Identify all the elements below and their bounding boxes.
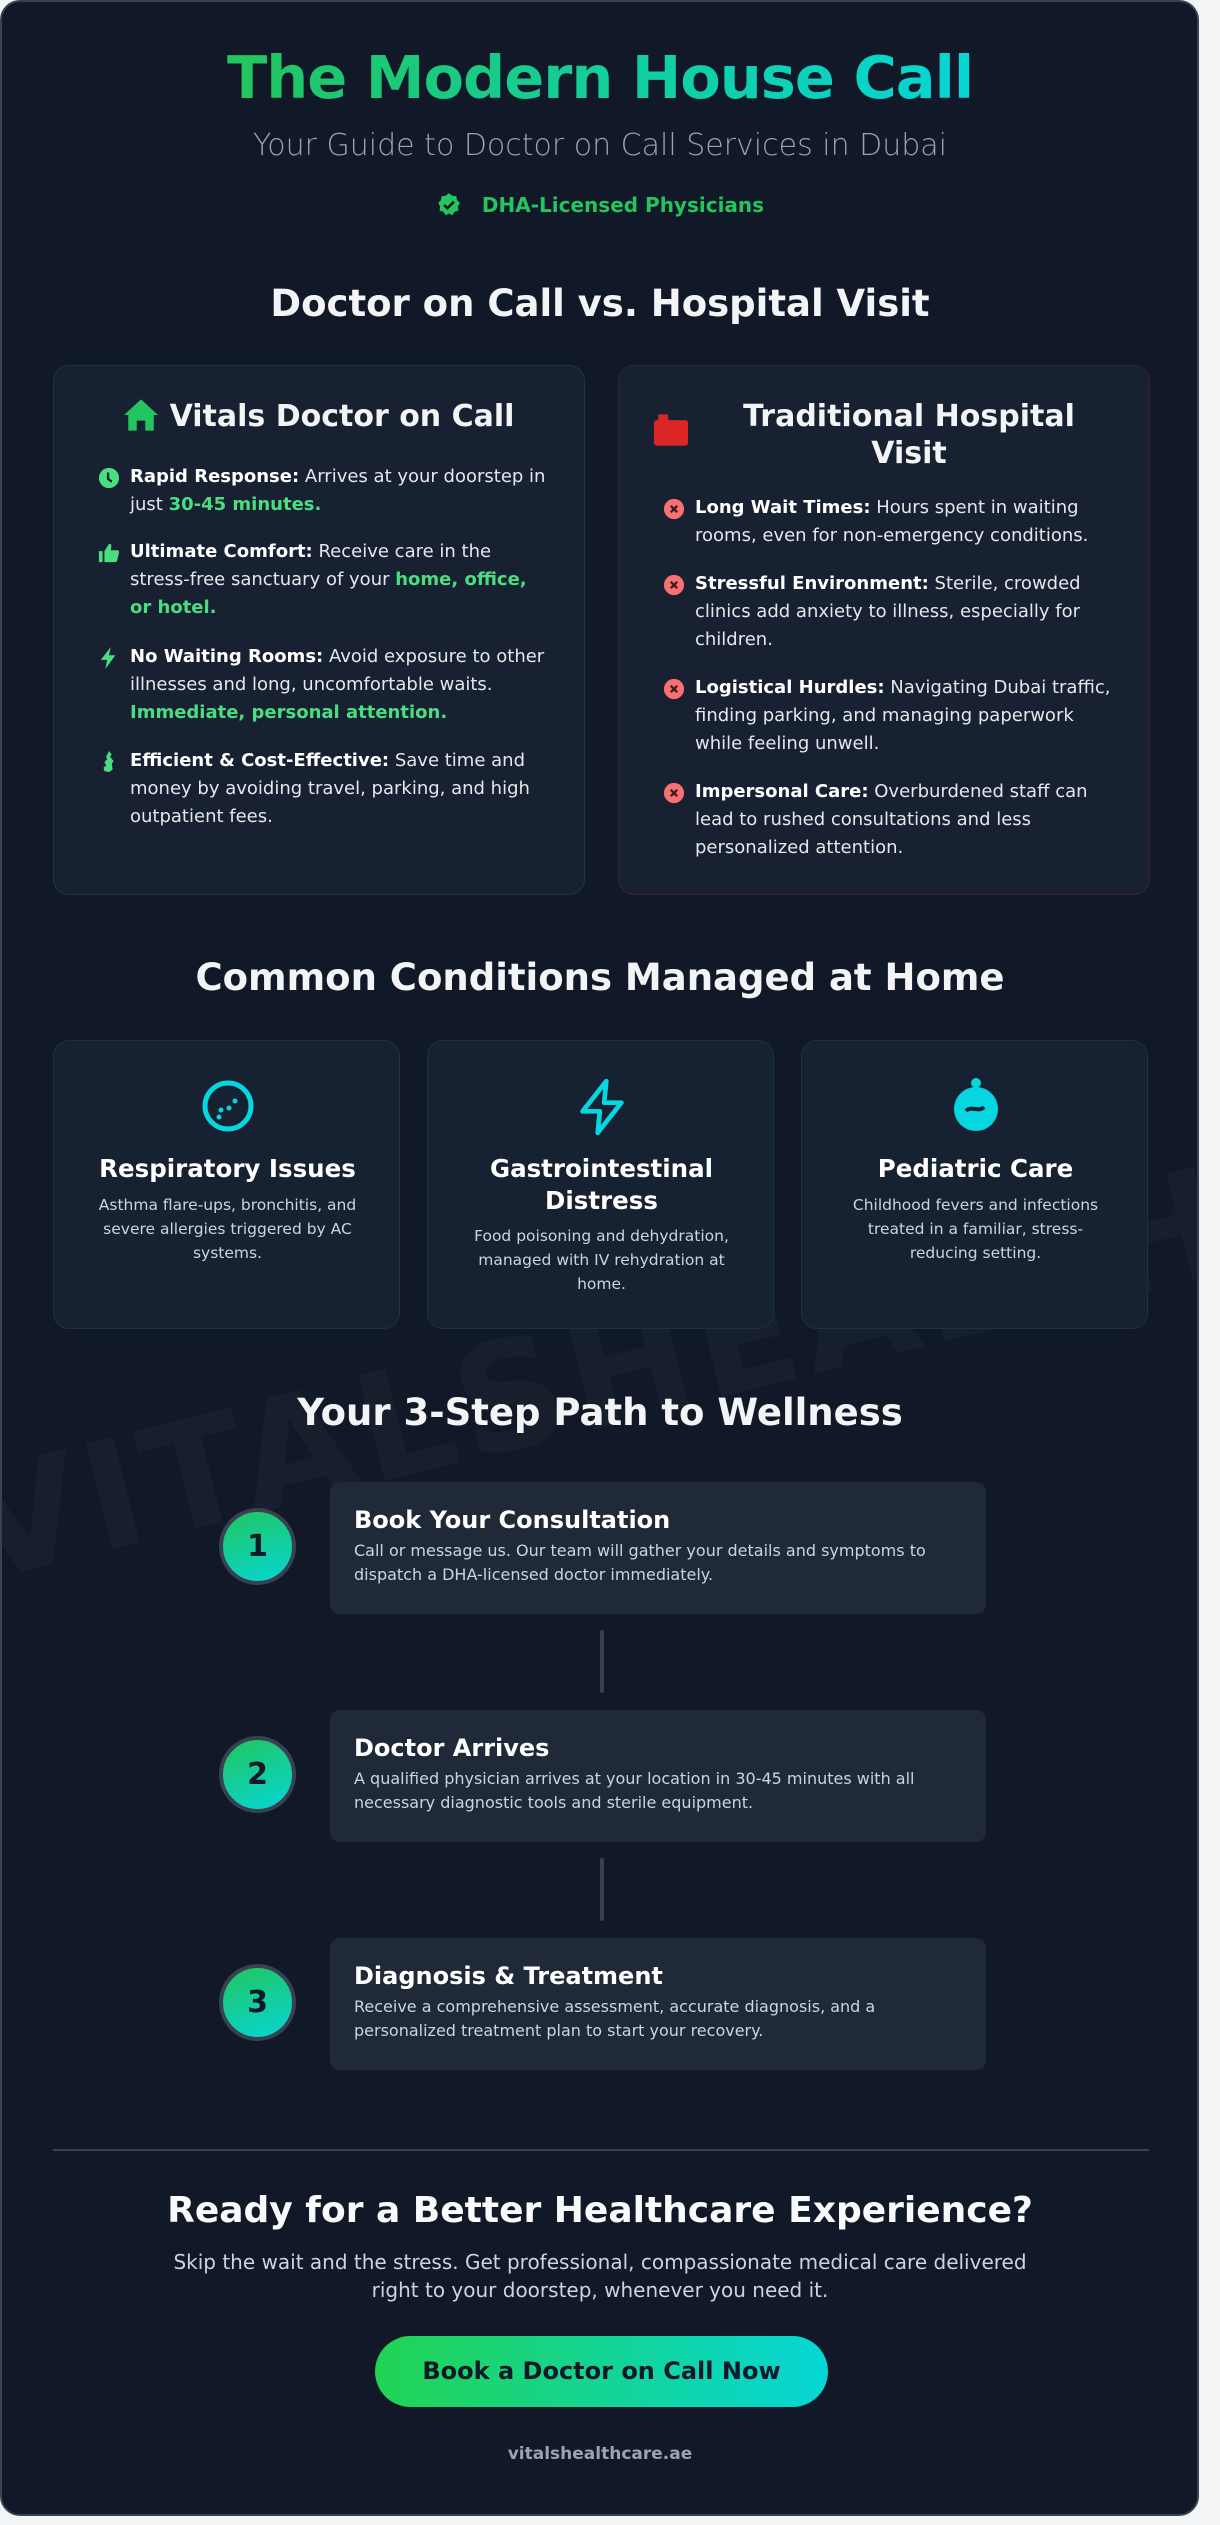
heading: conditions: Common Conditions Managed at Home [195,956,1005,999]
CTA heading: Ready for a Better Healthcare Experience? [167,2190,1033,2231]
item: cost effective: Efficient & Cost-Effective: Save time and money by avoiding travel, parking, and high outpatient fees. [130,750,530,827]
card: gastro: Gastrointestinal Distress [490,1154,713,1215]
panel heading: Vitals Doctor on Call [170,399,514,434]
card: gastro: Food poisoning and dehydration, managed with IV rehydration at home. [474,1227,729,1293]
card: respiratory: Asthma flare-ups, bronchitis, and severe allergies triggered by AC systems. [99,1196,356,1262]
card: gastro [427,1040,774,1329]
card: respiratory: Respiratory Issues [99,1154,356,1183]
step 1: Book Your Consultation [354,1506,670,1534]
footer url: vitalshealthcare.ae [508,2444,692,2464]
icon: bolt [580,1079,624,1135]
card: pediatric: Childhood fevers and infections treated in a familiar, stress-reducing setting. [853,1196,1098,1262]
step 2: 2 [247,1757,268,1792]
panel heading: Traditional Hospital Visit [743,399,1075,471]
step 1 [219,1482,986,1614]
CTA text: Skip the wait and the stress. Get professional, compassionate medical care delivered right to your doorstep, whenever you need it. [173,2250,1027,2302]
panel: doctor on call [53,365,585,895]
step 1: 1 [247,1529,268,1564]
icon: check badge [438,193,460,216]
CTA button: Book a Doctor on Call Now [422,2357,781,2385]
item: stressful: Stressful Environment: Sterile, crowded clinics add anxiety to illness, especially for children. [695,573,1081,650]
item: rapid response: Rapid Response: Arrives at your doorstep in just 30-45 minutes. [130,466,545,515]
connector 2 [600,1858,604,1921]
connector 1 [600,1630,604,1693]
step 2 [219,1710,986,1842]
item: impersonal: Impersonal Care: Overburdened staff can lead to rushed consultations and less personalized attention. [695,781,1088,858]
badge: DHA licensed: DHA-Licensed Physicians [482,193,764,217]
item: no waiting: No Waiting Rooms: Avoid exposure to other illnesses and long, uncomfortable waits. Immediate, personal attention. [130,646,544,723]
panel: hospital visit [618,365,1150,895]
step 2: A qualified physician arrives at your location in 30-45 minutes with all necessary diagnostic tools and sterile equipment. [354,1769,914,1812]
CTA button [375,2336,828,2407]
item: wait times: Long Wait Times: Hours spent in waiting rooms, even for non-emergency conditions. [695,497,1088,546]
step 1: Call or message us. Our team will gather your details and symptoms to dispatch a DHA-licensed doctor immediately. [354,1541,926,1584]
icon: hospital [654,414,688,446]
subtitle: Your Guide to Doctor on Call Services in Dubai [253,128,947,163]
card: pediatric [801,1040,1148,1329]
item: logistics: Logistical Hurdles: Navigating Dubai traffic, finding parking, and managing paperwork while feeling unwell. [695,677,1110,754]
icon: baby [954,1078,998,1131]
item: comfort: Ultimate Comfort: Receive care in the stress-free sanctuary of your home, office, or hotel. [130,541,527,618]
card: respiratory [53,1040,400,1329]
step 2: Doctor Arrives [354,1734,549,1762]
step 3: Receive a comprehensive assessment, accurate diagnosis, and a personalized treatment plan to start your recovery. [354,1997,875,2040]
heading: steps: Your 3-Step Path to Wellness [297,1391,903,1434]
card: pediatric: Pediatric Care [878,1154,1073,1183]
icon: lungs [202,1080,254,1132]
step 3: 3 [247,1985,268,2020]
title: The Modern House Call [227,43,973,112]
step 3: Diagnosis & Treatment [354,1962,663,1990]
heading: comparison: Doctor on Call vs. Hospital Visit [270,282,930,325]
